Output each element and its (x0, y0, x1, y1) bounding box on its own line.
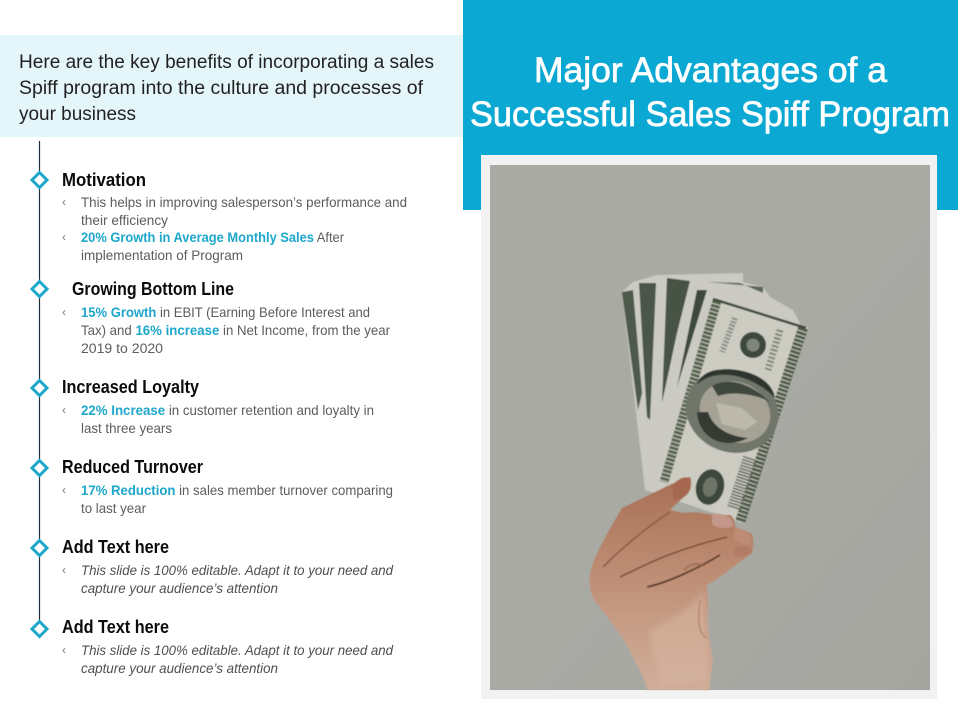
section: motivation: ‹ (62, 195, 66, 209)
section: increased loyalty: Increased Loyalty (62, 377, 199, 397)
section: add text 2: Add Text here (62, 617, 169, 637)
section: reduced turnover (62, 457, 393, 516)
section: motivation: ‹ (62, 230, 66, 244)
section: motivation: This helps in improving salesperson’s performance and (81, 194, 407, 210)
front bill (662, 298, 808, 523)
section: reduced turnover: ‹ (62, 483, 66, 497)
section: add text 2: capture your audience’s attention (81, 660, 278, 676)
section: add text 2: ‹ (62, 643, 66, 657)
section: motivation: Motivation (62, 170, 146, 190)
section: growing bottom line: Growing Bottom Line (72, 279, 234, 299)
section: add text 1: ‹ (62, 563, 66, 577)
section: motivation: implementation of Program (81, 247, 243, 263)
section: growing bottom line: 2019 to 2020 (81, 341, 163, 356)
section: add text 2: This slide is 100% editable. Adapt it to your need and (81, 642, 394, 658)
intro panel: your business (19, 104, 136, 125)
section: reduced turnover: 17% Reduction in sales member turnover comparing (81, 482, 393, 498)
back bills (622, 273, 800, 523)
section: add text 1: Add Text here (62, 537, 169, 557)
marker: motivation (32, 172, 47, 188)
intro panel: Here are the key benefits of incorporating a sales (19, 52, 434, 73)
section: reduced turnover: Reduced Turnover (62, 457, 203, 477)
intro panel (0, 35, 463, 137)
marker: reduced turnover (32, 460, 47, 476)
section: reduced turnover: to last year (81, 500, 146, 516)
intro panel: Spiff program into the culture and processes of (19, 78, 424, 99)
section: add text 1 (62, 537, 394, 596)
marker: add text 1 (32, 540, 47, 556)
section: add text 2 (62, 617, 394, 676)
marker: growing bottom line (32, 282, 47, 296)
title (470, 51, 950, 134)
section: increased loyalty: ‹ (62, 403, 66, 417)
section: increased loyalty (62, 377, 374, 436)
section: growing bottom line: Tax) and 16% increase in Net Income, from the year (81, 322, 390, 338)
title: Major Advantages of a (534, 51, 888, 90)
title: Successful Sales Spiff Program (470, 95, 950, 134)
hand (590, 477, 753, 690)
section: growing bottom line (62, 279, 390, 356)
section: motivation: their efficiency (81, 212, 168, 228)
header panel (463, 0, 958, 210)
marker: add text 2 (32, 622, 47, 636)
section: increased loyalty: last three years (81, 420, 172, 436)
section: growing bottom line: 15% Growth in EBIT (Earning Before Interest and (81, 304, 370, 320)
marker: increased loyalty (32, 380, 47, 396)
section: increased loyalty: 22% Increase in customer retention and loyalty in (81, 402, 374, 418)
section: growing bottom line: ‹ (62, 305, 66, 319)
section: motivation: 20% Growth in Average Monthly Sales After (81, 229, 344, 245)
section: add text 1: This slide is 100% editable. Adapt it to your need and (81, 562, 394, 578)
timeline (32, 141, 47, 636)
photo: hand holding dollar bills (481, 155, 937, 699)
section: add text 1: capture your audience’s attention (81, 580, 278, 596)
section: motivation (62, 170, 407, 263)
